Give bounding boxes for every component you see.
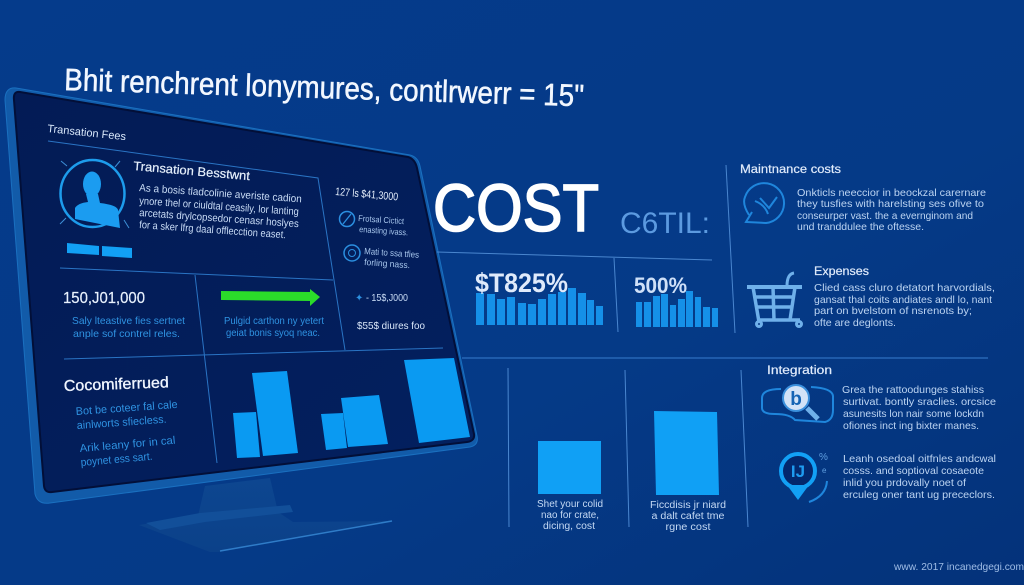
body text: transaction	[139, 182, 302, 241]
icon: magnifier: b	[790, 389, 802, 410]
body: location: Leanh osedoal oitfnles andcwal	[843, 453, 996, 465]
body: maintenance: conseurper vast. the a evernginom and	[797, 210, 973, 222]
side stat values: ✦	[355, 293, 363, 304]
stat: percent two: 500%	[634, 273, 687, 298]
icon: location pin	[781, 452, 828, 502]
body: integration: Grea the rattoodunges stahiss	[842, 384, 984, 396]
icon: person	[60, 160, 129, 228]
chart: bars one	[476, 288, 603, 325]
chart: bars two	[636, 291, 718, 327]
heading: maintenance: Maintnance costs	[740, 164, 841, 176]
body: location: cosss. and soptioval cosaeote	[843, 465, 984, 477]
body: integration: surtivat. bontly sraclies. orcsice	[843, 396, 996, 408]
caption one: dicing, cost	[543, 521, 595, 532]
body: maintenance	[797, 187, 986, 233]
heading: integration: Integration	[767, 365, 832, 377]
caption two	[650, 500, 726, 533]
side item one: enasting ivass.	[359, 224, 408, 237]
side stat values: - 15$,J000	[366, 292, 408, 304]
body text: cocomiferred	[75, 399, 178, 469]
center divider lines	[437, 165, 988, 527]
big stat: 150,J01,000	[63, 290, 145, 307]
monitor	[5, 88, 477, 552]
caption one	[537, 499, 603, 532]
icon: magnifier	[762, 385, 833, 422]
side stat: 127 ls $41,3000	[335, 186, 399, 203]
caption two: a dalt cafet tme	[652, 511, 725, 522]
small blue bars	[67, 243, 132, 258]
heading: transaction: Transation Besstwnt	[133, 159, 251, 183]
arrow caption: geiat bonis syoq neac.	[226, 328, 320, 339]
panel label: transaction fees: Transation Fees	[47, 123, 127, 143]
monitor frame	[5, 88, 477, 503]
screen divider lines	[48, 141, 443, 463]
stat caption	[72, 315, 185, 340]
caption two: rgne cost	[666, 522, 711, 533]
caption two: Ficcdisis jr niard	[650, 500, 726, 511]
heading: cocomiferred: Cocomiferrued	[64, 374, 169, 395]
body: location: inlid you prdovally noet of	[843, 477, 966, 489]
body: integration: ofiones inct ing bixter manes.	[843, 420, 979, 432]
stat caption: anple sof contrel reles.	[73, 328, 180, 340]
icon: location pin: IJ	[791, 462, 805, 481]
body: location	[843, 453, 996, 501]
body: integration: asunesits lon nair some lockdn	[843, 408, 984, 420]
body text: transaction: ynore thel or ciuldtal ceasily, lor lanting	[139, 195, 299, 218]
arrow: green	[221, 289, 320, 306]
side item one	[340, 212, 408, 237]
side item one: Frotsal Cictict	[358, 213, 405, 226]
icon: location pin: e	[822, 466, 827, 475]
body: expenses: ofte are deglonts.	[814, 317, 896, 329]
heading: cost: COST	[433, 171, 599, 245]
icon: cart	[747, 273, 802, 326]
caption one: Shet your colid	[537, 499, 603, 510]
footer url: www. 2017 incanedgegi.com	[893, 561, 1024, 573]
heading: expenses: Expenses	[814, 266, 869, 278]
body: expenses: Clied cass cluro detatort harvordials,	[814, 282, 995, 294]
side item two: forling nass.	[364, 257, 410, 270]
screen bar chart	[233, 358, 470, 458]
icon: location pin: %	[819, 452, 828, 463]
body: integration	[842, 384, 996, 432]
title: Bhit renchrent lonymures, contlrwerr = 15"	[64, 62, 585, 113]
body: expenses: part on bvelstom of nsrenots by;	[814, 305, 972, 317]
body: expenses: gansat thal coits andiates andl lo, nant	[814, 294, 992, 306]
stat caption: Saly lteastive fies sertnet	[72, 315, 185, 327]
monitor stand	[139, 478, 392, 552]
body: maintenance: und tranddulee the oftesse.	[797, 221, 924, 233]
icon: maintenance	[744, 183, 784, 223]
side item two	[344, 245, 420, 270]
body: maintenance: they tusfies with harelsting ses ofive to	[797, 198, 984, 210]
subheading: C6TIL:	[620, 207, 710, 240]
body text: cocomiferred: Bot be coteer fal cale	[75, 399, 178, 418]
body text: cocomiferred: poynet ess sart.	[80, 451, 153, 469]
stat: percent one: $T825%	[475, 268, 568, 298]
side stat values: $55$ diures foo	[357, 320, 425, 332]
arrow caption: Pulgid carthon ny yetert	[224, 316, 324, 327]
caption one: nao for crate,	[541, 510, 599, 521]
side item two: Mati to ssa tfies	[364, 246, 420, 260]
body: maintenance: Onkticls neeccior in beockzal carernare	[797, 187, 986, 199]
square bar two	[654, 411, 719, 495]
body text: transaction: As a bosis tladcolinie averiste cadion	[139, 182, 302, 205]
monitor screen	[14, 92, 474, 492]
body: expenses	[814, 282, 995, 329]
square bar one	[538, 441, 601, 494]
body text: transaction: arcetats drylcopsedor cenasr hoslyes	[139, 207, 299, 230]
body text: transaction: for a sker lfrg daal offlecction easet.	[139, 219, 286, 241]
side stat values	[355, 292, 425, 332]
body text: cocomiferred: ainlworts sfiecless.	[76, 414, 167, 432]
body text: cocomiferred: Arik leany for in cal	[79, 435, 176, 455]
body: location: erculeg oner tant ug prececlors.	[843, 489, 995, 501]
arrow caption	[224, 316, 324, 339]
